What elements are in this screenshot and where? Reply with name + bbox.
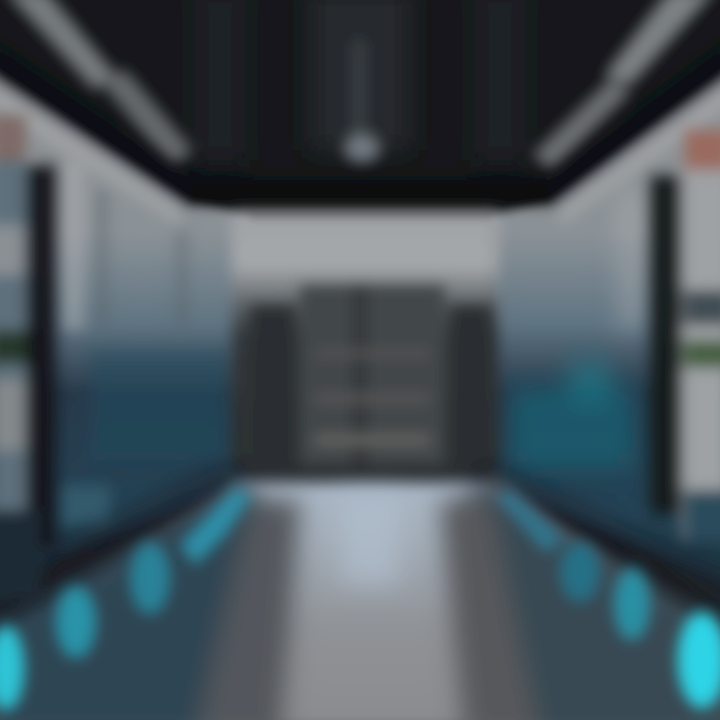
wall upper highlight strips	[0, 85, 720, 225]
ceiling edge beam	[0, 40, 720, 205]
left wall	[0, 70, 250, 610]
floor dark side bands	[0, 490, 720, 720]
right rack frame	[650, 130, 720, 540]
wall floor junction shadow	[0, 470, 720, 620]
floor	[0, 482, 720, 720]
ceiling	[0, 0, 720, 210]
back wall	[232, 212, 498, 478]
ceiling light strips	[5, 0, 715, 170]
right wall vertical structure	[510, 190, 642, 470]
right wall	[490, 70, 720, 610]
floor cyan lights left	[0, 488, 252, 710]
floor cyan lights right	[495, 490, 720, 708]
left rack frame	[0, 115, 56, 600]
left wall vertical structure	[60, 160, 230, 525]
back wall server racks	[250, 285, 492, 465]
